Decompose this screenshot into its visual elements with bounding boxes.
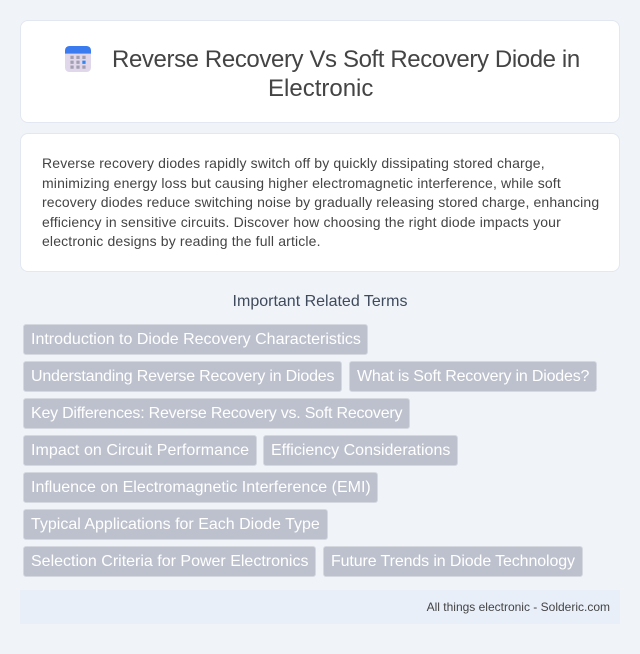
tag (23, 546, 316, 577)
tag: Influence on Electromagnetic Interference (EMI) (31, 479, 371, 496)
tag (23, 324, 368, 355)
title (112, 46, 580, 102)
tag: Future Trends in Diode Technology (331, 553, 575, 570)
tag (23, 398, 410, 429)
panel: header card (20, 20, 620, 123)
tag (23, 509, 328, 540)
tag (23, 472, 378, 503)
tag: Typical Applications for Each Diode Type (31, 516, 320, 533)
tag: Impact on Circuit Performance (31, 442, 249, 459)
description text (42, 155, 599, 249)
tag: What is Soft Recovery in Diodes? (357, 368, 589, 385)
heading: important related terms: Important Related Terms (233, 293, 407, 310)
tag (23, 361, 342, 392)
footer bar (20, 590, 620, 624)
title: Reverse Recovery Vs Soft Recovery Diode in (112, 46, 580, 73)
tag: Efficiency Considerations (271, 442, 450, 459)
description text: minimizing energy loss but causing higher electromagnetic interference, while soft (42, 174, 561, 190)
tag group: related terms (23, 324, 597, 577)
description text: efficiency in sensitive circuits. Discover how choosing the right diode impacts your (42, 214, 561, 230)
tag: Key Differences: Reverse Recovery vs. Soft Recovery (31, 405, 402, 422)
tag (263, 435, 458, 466)
title: Electronic (268, 75, 373, 102)
tag (323, 546, 583, 577)
icon: calendar (65, 46, 91, 72)
tag: Introduction to Diode Recovery Characteristics (31, 331, 361, 348)
tag (23, 435, 257, 466)
tag (349, 361, 597, 392)
description text: recovery diodes reduce switching noise by gradually releasing stored charge, enhancing (42, 194, 599, 210)
panel: description card (20, 133, 620, 272)
tag: Selection Criteria for Power Electronics (31, 553, 308, 570)
description text: Reverse recovery diodes rapidly switch off by quickly dissipating stored charge, (42, 155, 545, 171)
footer text: All things electronic - Solderic.com (427, 600, 610, 614)
tag: Understanding Reverse Recovery in Diodes (31, 368, 334, 385)
description text: electronic designs by reading the full article. (42, 233, 321, 249)
